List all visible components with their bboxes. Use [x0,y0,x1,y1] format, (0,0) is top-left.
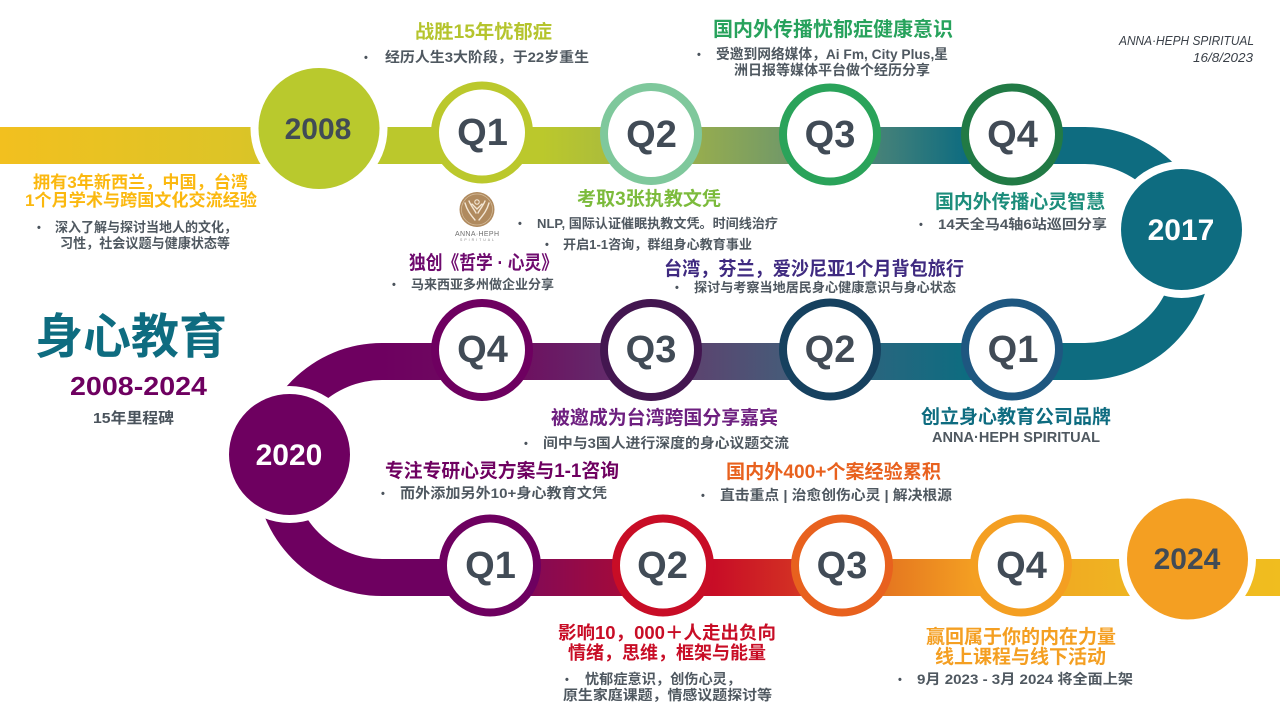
node: middle Q3: Q3 [626,329,676,371]
subtitle: 15年里程碑 [93,409,174,427]
text: top Q1: 经历人生3大阶段，于22岁重生 [385,49,589,65]
text: top Q4: • [919,219,923,231]
text: top Q2: 开启1-1咨询，群组身心教育事业 [563,237,752,252]
milestone: 2017 [1113,161,1250,298]
text: left intro: 深入了解与探讨当地人的文化， [55,219,237,235]
text: top Q2 [518,187,778,252]
text: middle Q3: 被邀成为台湾跨国分享嘉宾 [551,406,778,429]
node: top Q3 [783,88,877,182]
brand and date: 16/8/2023 [1193,50,1254,65]
text: left intro: 拥有3年新西兰，中国，台湾 [33,172,248,192]
text: bottom Q4: 线上课程与线下活动 [935,646,1106,668]
node: middle Q4 [435,303,529,397]
node: bottom Q1: Q1 [465,545,516,587]
text: bottom Q2: 影响10，000＋人走出负向 [558,623,776,643]
node: top Q4 [965,88,1059,182]
text: bottom Q3: 直击重点 | 治愈创伤心灵 | 解决根源 [720,487,952,503]
node: bottom Q1 [443,518,537,612]
text: bottom Q1: 而外添加另外10+身心教育文凭 [400,485,607,501]
node: bottom Q4 [974,518,1068,612]
node: top Q1 [435,86,529,180]
text: middle Q3 [524,406,789,451]
milestone: 2008: 2008 [285,113,351,146]
date range: 2008-2024 [70,371,208,401]
text: top Q4 [919,191,1107,232]
text: top Q2: NLP, 国际认证催眠执教文凭。时间线治疗 [537,216,778,231]
text: left intro [25,172,257,251]
text: bottom Q2: 原生家庭课题，情感议题探讨等 [563,687,772,703]
text: middle Q4: • [392,279,396,291]
node: bottom Q4: Q4 [996,545,1047,587]
milestone: 2024: 2024 [1154,543,1221,576]
text: bottom Q2: • [565,674,569,686]
text: bottom Q4: 9月 2023 - 3月 2024 将全面上架 [917,671,1133,687]
text: top Q3: 国内外传播忧郁症健康意识 [713,17,953,41]
text: top Q2: 考取3张执教文凭 [577,187,721,210]
text: left intro: 习性，社会议题与健康状态等 [60,235,230,251]
text: bottom Q1 [381,459,619,501]
icon: Anna-Heph logo [455,192,499,242]
text: top Q3: 受邀到网络媒体，Ai Fm, City Plus,星 [716,46,948,62]
text: bottom Q1: 专注专研心灵方案与1-1咨询 [385,459,619,482]
ribbon: top band [0,127,1212,380]
main title: 身心教育 [35,311,227,364]
text: middle Q1 [921,405,1111,446]
text: bottom Q2: 情绪，思维，框架与能量 [568,643,766,663]
node: middle Q2: Q2 [805,329,855,371]
text: middle Q2 [664,257,964,295]
node: middle Q1 [965,302,1059,396]
text: top Q1 [364,20,589,65]
text: top Q2: • [545,239,549,251]
icon: Anna-Heph logo: SPIRITUAL [460,238,494,242]
text: middle Q3: 间中与3国人进行深度的身心议题交流 [543,435,789,451]
milestone: 2020: 2020 [256,439,322,472]
text: middle Q4: 马来西亚多州做企业分享 [411,277,554,292]
milestone: 2008 [250,60,388,197]
text: middle Q4 [392,251,558,292]
text: top Q4: 14天全马4轴6站巡回分享 [938,216,1107,232]
brand and date: ANNA·HEPH SPIRITUAL [1118,33,1254,48]
text: bottom Q4: • [898,674,902,686]
text: top Q3 [697,17,953,78]
text: middle Q1: 创立身心教育公司品牌 [921,405,1111,428]
text: left intro: • [37,222,41,234]
text: top Q3: 洲日报等媒体平台做个经历分享 [734,62,930,78]
node: bottom Q3: Q3 [817,545,867,587]
text: top Q1: • [364,52,368,64]
text: middle Q3: • [524,438,528,450]
text: top Q3: • [697,49,701,61]
text: bottom Q2 [558,623,776,703]
node: middle Q3 [604,303,698,397]
text: bottom Q3: 国内外400+个案经验累积 [726,460,941,483]
node: top Q4: Q4 [987,114,1038,156]
text: bottom Q3: • [701,490,705,502]
text: top Q2: • [518,218,522,230]
text: bottom Q4: 赢回属于你的内在力量 [926,625,1116,648]
text: bottom Q2: 忧郁症意识，创伤心灵， [585,671,741,687]
text: middle Q4: 独创《哲学 · 心灵》 [409,251,558,274]
text: top Q1: 战胜15年忧郁症 [415,20,552,43]
text: bottom Q3 [701,460,952,503]
node: bottom Q2 [616,518,710,612]
brand and date [1118,33,1254,65]
ribbon: middle band [256,343,1086,596]
node: bottom Q2: Q2 [637,545,688,587]
node: middle Q4: Q4 [457,329,508,371]
node: top Q3: Q3 [805,114,855,156]
icon: Anna-Heph logo: ANNA·HEPH [455,231,499,238]
text: bottom Q1: • [381,488,385,500]
text: middle Q2: 探讨与考察当地居民身心健康意识与身心状态 [694,280,956,295]
milestone: 2024 [1119,490,1256,628]
text: middle Q1: ANNA·HEPH SPIRITUAL [932,429,1100,446]
node: middle Q1: Q1 [988,329,1038,371]
text: middle Q2: 台湾，芬兰，爱沙尼亚1个月背包旅行 [664,257,964,280]
text: bottom Q4 [898,625,1133,687]
milestone: 2020 [221,386,358,523]
text: left intro: 1个月学术与跨国文化交流经验 [25,190,257,210]
text: top Q4: 国内外传播心灵智慧 [935,191,1105,213]
text: middle Q2: • [675,282,679,294]
ribbon: bottom band [382,559,1280,596]
node: top Q2: Q2 [626,114,677,156]
node: top Q2 [604,87,698,181]
node: bottom Q3 [795,518,889,612]
milestone: 2017: 2017 [1148,214,1214,247]
node: top Q1: Q1 [457,112,508,154]
node: middle Q2 [783,302,877,396]
